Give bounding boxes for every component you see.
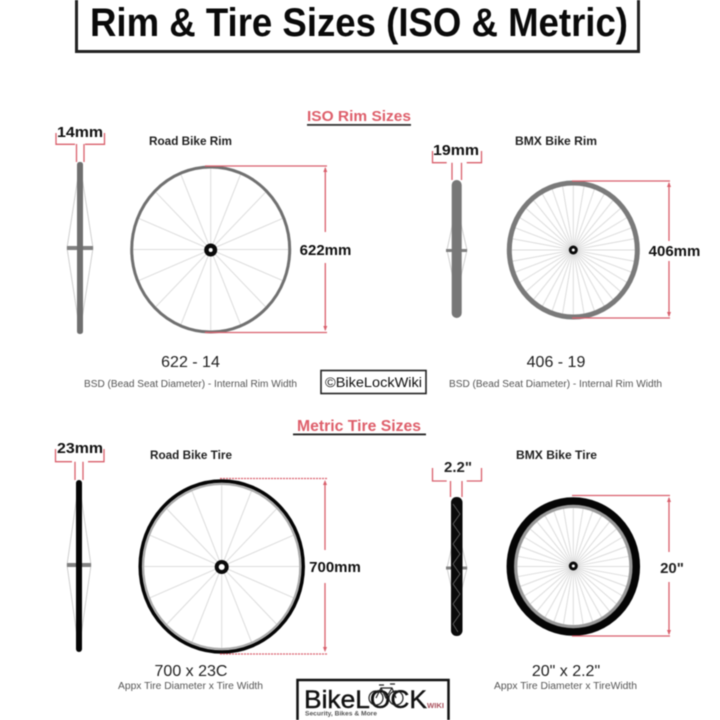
panel: BMX bike rim — [432, 134, 700, 390]
width dimension: 2.2 inch: 2.2" — [444, 459, 472, 476]
label: BMX bike rim: BMX Bike Rim — [515, 134, 597, 148]
diameter dimension: 20 inch — [572, 496, 684, 636]
diameter dimension: 622mm: 622mm — [300, 242, 351, 259]
diameter dimension: 700mm — [220, 478, 361, 654]
copyright badge — [321, 370, 426, 394]
size code: 20 x 2.2: 20" x 2.2" — [532, 663, 600, 680]
caption: BMX tire: Appx Tire Diameter x TireWidth — [494, 681, 637, 692]
logo: BikeLock Wiki: WIKI — [427, 703, 444, 710]
size code: 406 - 19: 406 - 19 — [527, 354, 585, 371]
diameter dimension: 700mm: 700mm — [309, 559, 361, 576]
panel: road bike rim — [56, 124, 351, 390]
width dimension: 14mm: 14mm — [57, 124, 103, 141]
panel: road bike tire — [56, 440, 361, 692]
diameter dimension: 622mm — [205, 166, 351, 332]
label: BMX bike tire: BMX Bike Tire — [516, 448, 597, 462]
title box: Rim & Tire Sizes (ISO & Metric) — [90, 1, 628, 45]
front view: road rim — [132, 167, 290, 332]
panel: BMX bike tire — [432, 448, 684, 692]
front view: road tire — [140, 481, 303, 652]
size code: 700 x 23C: 700 x 23C — [155, 663, 227, 680]
width dimension: 23mm — [56, 440, 104, 480]
heading: Metric Tire Sizes: Metric Tire Sizes — [297, 418, 421, 435]
width dimension: 14mm — [56, 124, 104, 162]
heading: ISO Rim Sizes: ISO Rim Sizes — [307, 108, 411, 125]
width dimension: 19mm — [432, 142, 482, 180]
diameter dimension: 406mm: 406mm — [649, 243, 700, 260]
caption: BSD BMX rim: BSD (Bead Seat Diameter) - Internal Rim Width — [449, 379, 662, 390]
logo: BikeLock Wiki — [298, 680, 448, 720]
size code: 622 - 14: 622 - 14 — [161, 354, 220, 371]
side view: BMX rim — [446, 180, 467, 318]
logo: BikeLock Wiki: Security, Bikes & More — [305, 710, 377, 718]
width dimension: 2.2 inch — [432, 459, 482, 497]
front view: BMX tire — [510, 501, 636, 632]
diameter dimension: 406mm — [572, 181, 700, 318]
side view: road tire — [67, 480, 91, 652]
caption: BSD road rim: BSD (Bead Seat Diameter) - Internal Rim Width — [84, 379, 297, 390]
copyright badge: ©BikeLockWiki — [325, 374, 422, 390]
width dimension: 23mm: 23mm — [57, 440, 103, 457]
logo: BikeLock Wiki: BikeLOCK — [304, 686, 427, 714]
side view: BMX tire — [446, 497, 467, 636]
icon: bicycle — [369, 684, 403, 705]
diameter dimension: 20 inch: 20" — [660, 560, 684, 577]
label: road bike rim: Road Bike Rim — [149, 134, 232, 148]
front view: BMX rim — [509, 183, 637, 317]
width dimension: 19mm: 19mm — [433, 142, 479, 159]
label: road bike tire: Road Bike Tire — [150, 448, 232, 462]
side view: road rim — [67, 162, 93, 334]
caption: road tire: Appx Tire Diameter x Tire Width — [118, 681, 263, 692]
